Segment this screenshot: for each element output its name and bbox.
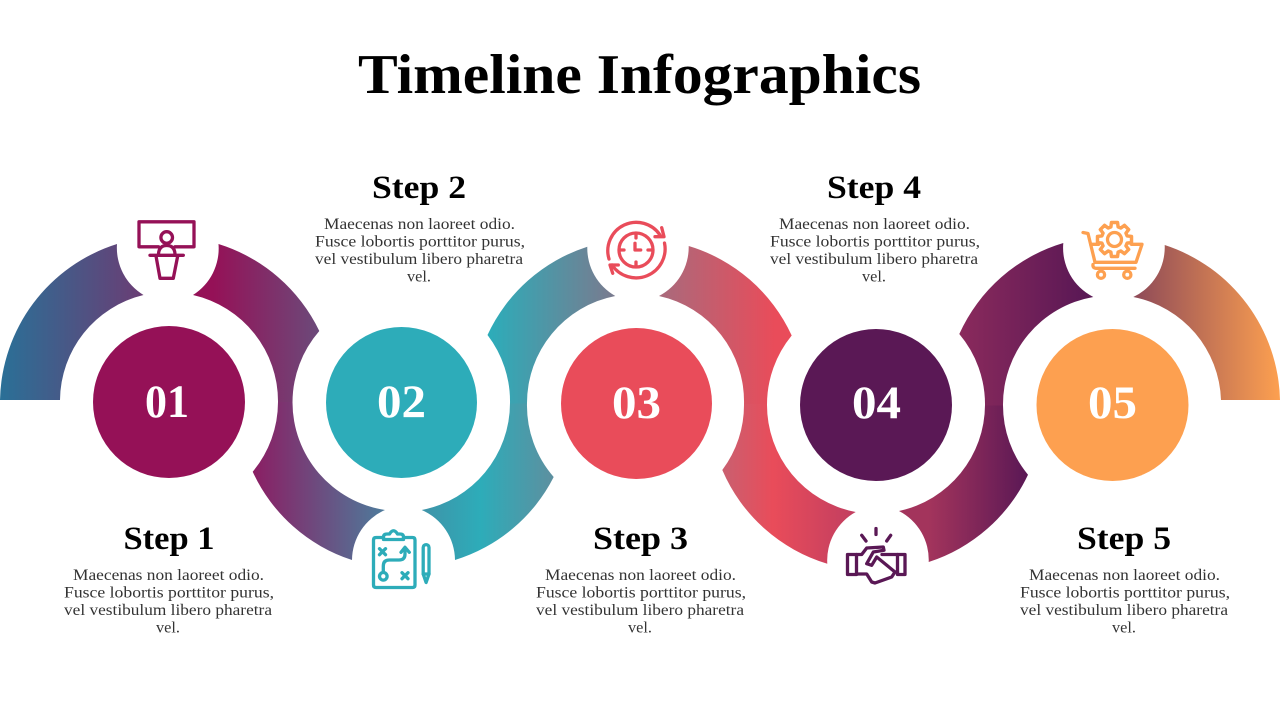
text block: step 4: Fusce lobortis porttitor purus, <box>770 234 980 250</box>
text block: step 5: Maecenas non laoreet odio. <box>1029 567 1220 584</box>
text block: step 3: Maecenas non laoreet odio. <box>545 567 736 584</box>
text block: step 1: Fusce lobortis porttitor purus, <box>64 584 274 602</box>
text block: step 1: vel. <box>156 620 180 636</box>
ribbon segment: right of icon 2 <box>422 403 554 560</box>
text block: step 2: Maecenas non laoreet odio. <box>324 216 515 233</box>
text block: step 1: Maecenas non laoreet odio. <box>73 567 264 584</box>
ribbon segment: right of icon 1 <box>193 244 319 402</box>
text block: step 3: vel vestibulum libero pharetra <box>536 602 744 619</box>
ribbon segment: left of icon 5 <box>959 243 1093 406</box>
text block: step 1 <box>64 521 274 636</box>
ribbon segment: left of icon 3 <box>488 247 615 404</box>
text block: step 1: vel vestibulum libero pharetra <box>64 602 272 619</box>
ribbon segment: left of icon 1 <box>0 244 144 400</box>
ribbon segment: right of icon 4 <box>899 405 1028 562</box>
step 1 number circle <box>93 326 245 478</box>
text block: step 3: vel. <box>628 620 652 636</box>
step 5 number circle: 05 <box>1088 377 1137 429</box>
icon: handshake <box>848 528 905 583</box>
text block: step 5: Fusce lobortis porttitor purus, <box>1020 584 1230 602</box>
text block: step 3: Fusce lobortis porttitor purus, <box>536 584 746 602</box>
ribbon segment: left of icon 4 <box>722 404 856 564</box>
title: Timeline Infographics <box>358 44 921 106</box>
text block: step 4: Maecenas non laoreet odio. <box>779 216 970 233</box>
text block: step 3 <box>536 521 746 636</box>
step 3 number circle: 03 <box>612 377 661 429</box>
text block: step 2: Fusce lobortis porttitor purus, <box>315 234 525 250</box>
ribbon segment: right of icon 5 <box>1133 245 1280 400</box>
step 2 number circle: 02 <box>377 376 426 428</box>
icon: clock with cycle arrows <box>608 222 665 278</box>
text block: step 2: Step 2 <box>372 170 466 206</box>
step 3 number circle <box>561 328 712 479</box>
text block: step 3: Step 3 <box>593 521 688 557</box>
step 1 number circle: 01 <box>145 376 189 428</box>
step 4 number circle: 04 <box>852 377 901 429</box>
text block: step 4: vel vestibulum libero pharetra <box>770 251 978 268</box>
text block: step 4: Step 4 <box>827 170 921 206</box>
icon: shopping cart with gear <box>1083 222 1142 278</box>
icon: presenter at podium <box>139 222 194 278</box>
text block: step 2: vel vestibulum libero pharetra <box>315 251 523 268</box>
text block: step 5: vel. <box>1112 620 1136 636</box>
text block: step 4 <box>770 170 980 286</box>
text block: step 2: vel. <box>407 268 431 286</box>
text block: step 2 <box>315 170 525 286</box>
icon: strategy clipboard <box>374 531 429 588</box>
step 4 number circle <box>800 329 952 481</box>
ribbon segment: right of icon 3 <box>659 246 792 404</box>
text block: step 5 <box>1020 521 1230 636</box>
text block: step 1: Step 1 <box>124 521 214 557</box>
step 2 number circle <box>326 327 477 478</box>
wavy gradient ribbon <box>0 243 1280 564</box>
text block: step 5: Step 5 <box>1077 521 1171 557</box>
text block: step 4: vel. <box>862 268 886 286</box>
text block: step 5: vel vestibulum libero pharetra <box>1020 602 1228 619</box>
ribbon segment: left of icon 2 <box>253 402 385 560</box>
step 5 number circle <box>1036 329 1188 481</box>
